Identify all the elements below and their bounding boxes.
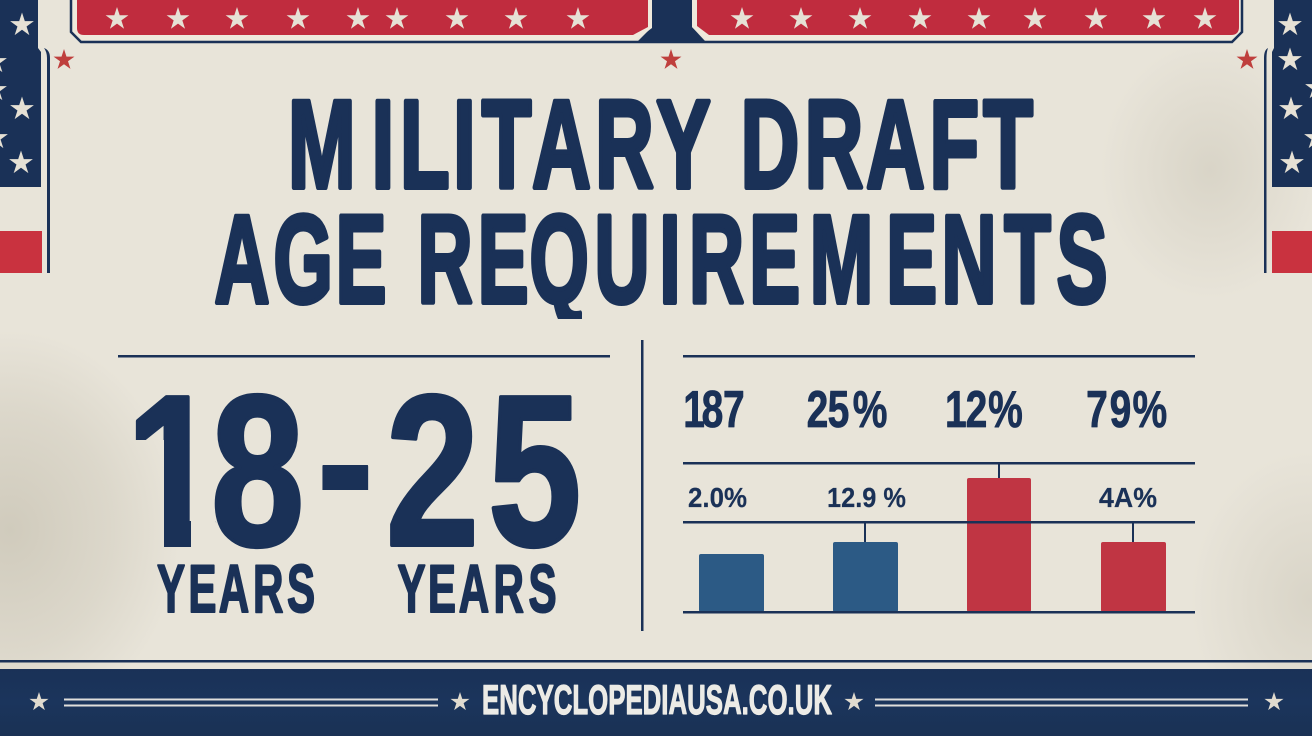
title	[214, 98, 1106, 319]
right flag: navy canton with stars, red stripe and rule	[1264, 0, 1312, 273]
stat numbers: 79%	[1086, 379, 1167, 438]
icon: footer star far right	[1264, 692, 1284, 710]
icon: footer star inner left	[450, 692, 470, 710]
bar labels: 4A%	[1099, 482, 1157, 513]
icon: footer star far left	[29, 692, 49, 710]
bar labels	[688, 482, 1157, 513]
stat numbers	[683, 379, 1167, 438]
top banner: left red panel with stars	[72, 0, 652, 40]
big age numbers: 18-25	[126, 340, 581, 591]
title: AGE REQUIREMENTS	[214, 189, 1107, 329]
panel: statistics chart	[683, 355, 1195, 614]
panel: age range	[118, 340, 610, 626]
vertical divider	[641, 340, 644, 631]
label: years right: YEARS	[397, 551, 557, 626]
footer band	[0, 669, 1312, 736]
title: MILITARY DRAFT	[288, 76, 1033, 215]
footer website text: ENCYCLOPEDIAUSA.CO.UK	[482, 676, 832, 723]
icon: red star left	[54, 49, 74, 69]
stat numbers: 12%	[945, 379, 1023, 438]
top banner: navy outline and centre column	[71, 0, 1242, 43]
top banner: right red panel with stars	[692, 0, 1240, 40]
rule above footer	[0, 660, 1312, 662]
footer double rule right	[875, 700, 1248, 706]
label: years left: YEARS	[157, 551, 315, 626]
stat numbers: 25%	[807, 379, 887, 438]
icon: red star centre	[661, 49, 681, 69]
icon: footer star inner right	[844, 692, 864, 710]
bar labels: 2.0%	[688, 482, 747, 513]
bar chart	[699, 463, 1166, 612]
stat numbers: 187	[683, 379, 745, 438]
footer double rule left	[64, 700, 438, 706]
left flag: navy canton with stars, red stripe and rule	[0, 0, 50, 273]
bar labels: 12.9 %	[827, 482, 906, 513]
icon: red star right	[1237, 49, 1257, 69]
